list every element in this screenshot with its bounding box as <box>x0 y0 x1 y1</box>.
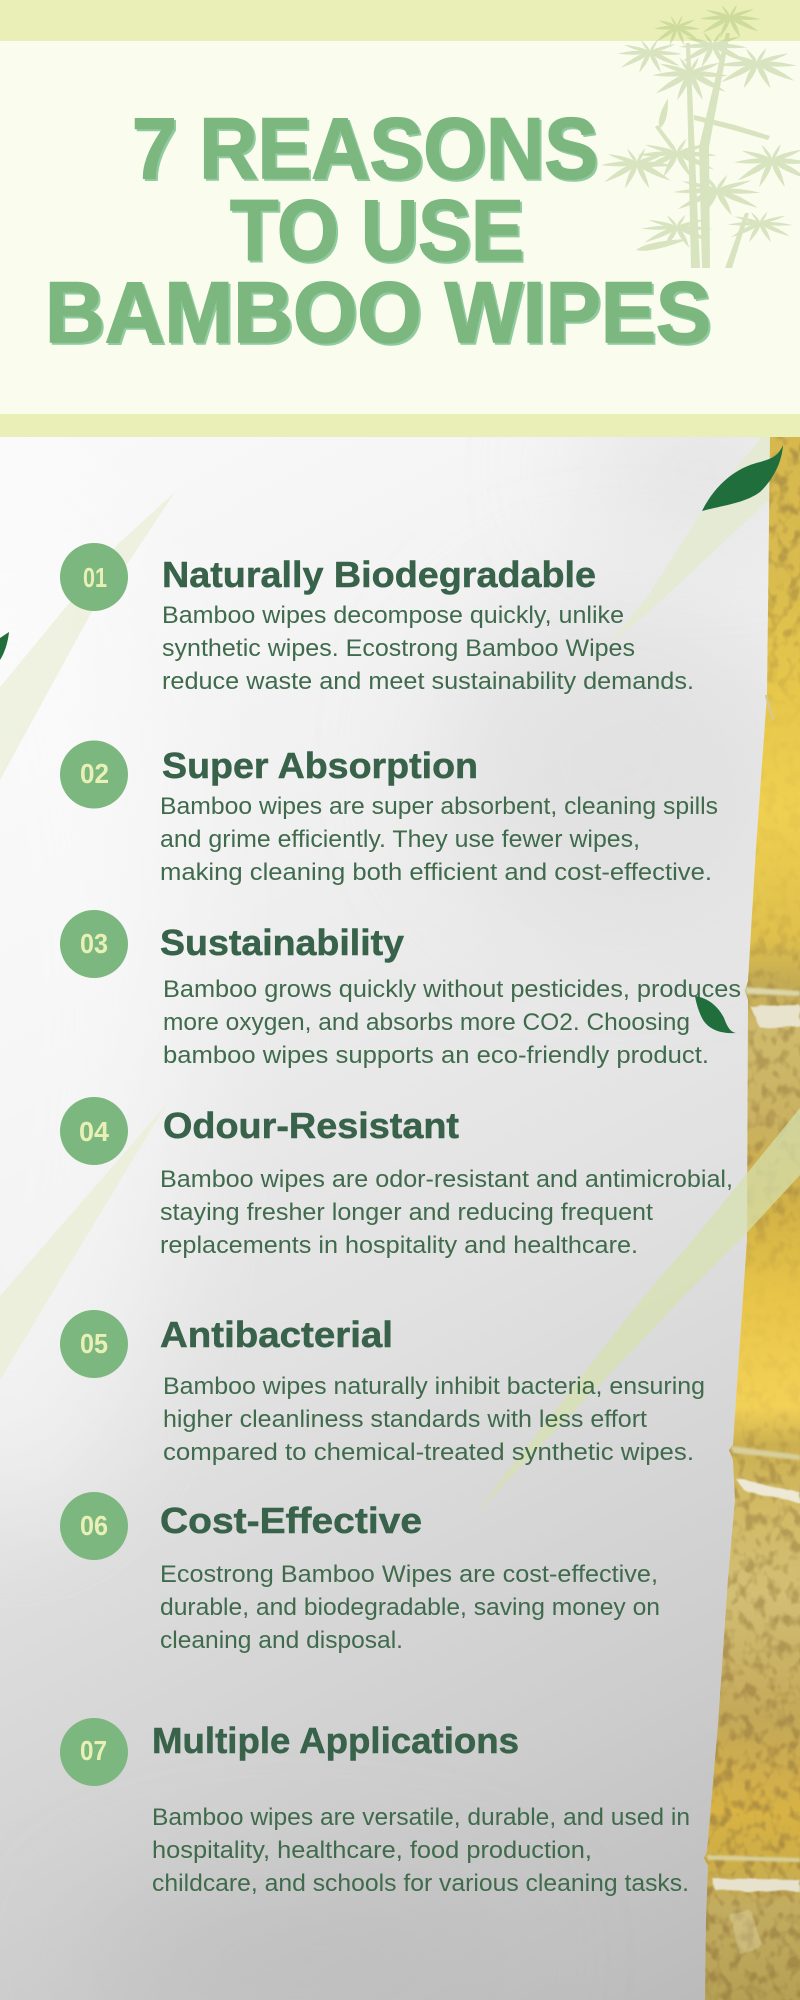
title shadow: 7 REASONS <box>134 103 600 199</box>
body 05: Bamboo wipes naturally inhibit bacteria, ensuring <box>163 1373 705 1400</box>
heading 05: Antibacterial <box>160 1314 393 1355</box>
heading 01: Naturally Biodegradable <box>162 554 596 595</box>
title shadow: BAMBOO WIPES <box>47 267 713 363</box>
body 07: Bamboo wipes are versatile, durable, and used in <box>152 1804 690 1831</box>
body 03: Bamboo grows quickly without pesticides, produces <box>163 976 741 1003</box>
title shadow <box>47 103 713 363</box>
heading 03: Sustainability <box>160 922 404 963</box>
number badge 02 <box>60 740 128 808</box>
heading 04: Odour-Resistant <box>163 1105 459 1146</box>
body 04 <box>160 1166 733 1259</box>
body 06 <box>160 1561 660 1654</box>
title shadow: TO USE <box>232 185 526 281</box>
number badge 03 <box>60 910 128 978</box>
heading 06: Cost-Effective <box>160 1500 422 1541</box>
body 07: hospitality, healthcare, food production, <box>152 1837 592 1864</box>
body 03 <box>163 976 741 1069</box>
translucent blade: upper left <box>0 492 175 780</box>
title text <box>45 101 711 361</box>
number badge 01 <box>60 543 128 611</box>
number badge 04 <box>60 1097 128 1165</box>
body 03: more oxygen, and absorbs more CO2. Choosing <box>163 1009 690 1036</box>
number badge 01: 01 <box>83 562 107 593</box>
number badge 03: 03 <box>80 928 108 959</box>
reason 01 <box>60 543 694 695</box>
body 04: replacements in hospitality and healthcare. <box>160 1232 638 1259</box>
translucent blade: mid left <box>0 1105 166 1380</box>
body 07: childcare, and schools for various cleaning tasks. <box>152 1870 689 1897</box>
body 03: bamboo wipes supports an eco-friendly product. <box>163 1042 709 1069</box>
translucent blade: right, over stalk <box>474 1108 800 1515</box>
body 02 <box>160 793 718 886</box>
leaf: over reason 03 text <box>695 996 736 1033</box>
heading 02: Super Absorption <box>162 745 478 786</box>
reason 03 <box>60 910 741 1069</box>
body 06: cleaning and disposal. <box>160 1627 403 1654</box>
reason 02 <box>60 740 718 886</box>
body 07 <box>152 1804 690 1897</box>
body 02: Bamboo wipes are super absorbent, cleaning spills <box>160 793 718 820</box>
body 06: Ecostrong Bamboo Wipes are cost-effective, <box>160 1561 658 1588</box>
body 05: higher cleanliness standards with less effort <box>163 1406 647 1433</box>
number badge 05 <box>60 1310 128 1378</box>
title text: BAMBOO WIPES <box>45 265 711 361</box>
leaf: left edge <box>0 632 9 660</box>
number badge 04: 04 <box>79 1116 109 1147</box>
body 01: reduce waste and meet sustainability demands. <box>162 668 694 695</box>
body 02: and grime efficiently. They use fewer wipes, <box>160 826 640 853</box>
body 01 <box>162 602 694 695</box>
background: misty grey gradient <box>0 410 800 2000</box>
body 05 <box>163 1373 705 1466</box>
body 05: compared to chemical-treated synthetic wipes. <box>163 1439 694 1466</box>
heading 07: Multiple Applications <box>152 1720 519 1761</box>
number badge 02: 02 <box>80 758 109 789</box>
reason 04 <box>60 1097 733 1259</box>
title <box>45 101 713 363</box>
number badge 06: 06 <box>80 1510 108 1541</box>
body 06: durable, and biodegradable, saving money on <box>160 1594 660 1621</box>
number badge 07 <box>60 1718 128 1786</box>
reason 05 <box>60 1310 705 1466</box>
body 04: Bamboo wipes are odor-resistant and antimicrobial, <box>160 1166 733 1193</box>
body 01: synthetic wipes. Ecostrong Bamboo Wipes <box>162 635 635 662</box>
body 01: Bamboo wipes decompose quickly, unlike <box>162 602 624 629</box>
icon: bamboo plant <box>601 4 800 268</box>
panel: header <box>0 0 800 437</box>
leaf: top right <box>702 445 783 511</box>
reason 07 <box>60 1718 690 1897</box>
number badge 05: 05 <box>80 1328 108 1359</box>
bamboo stalk <box>704 437 800 2000</box>
translucent blade: upper right <box>608 415 800 645</box>
title text: 7 REASONS <box>132 101 598 197</box>
reason 06 <box>60 1492 660 1654</box>
body 04: staying fresher longer and reducing frequent <box>160 1199 653 1226</box>
number badge 06 <box>60 1492 128 1560</box>
title text: TO USE <box>230 183 524 279</box>
body 02: making cleaning both efficient and cost-effective. <box>160 859 712 886</box>
number badge 07: 07 <box>80 1735 107 1766</box>
